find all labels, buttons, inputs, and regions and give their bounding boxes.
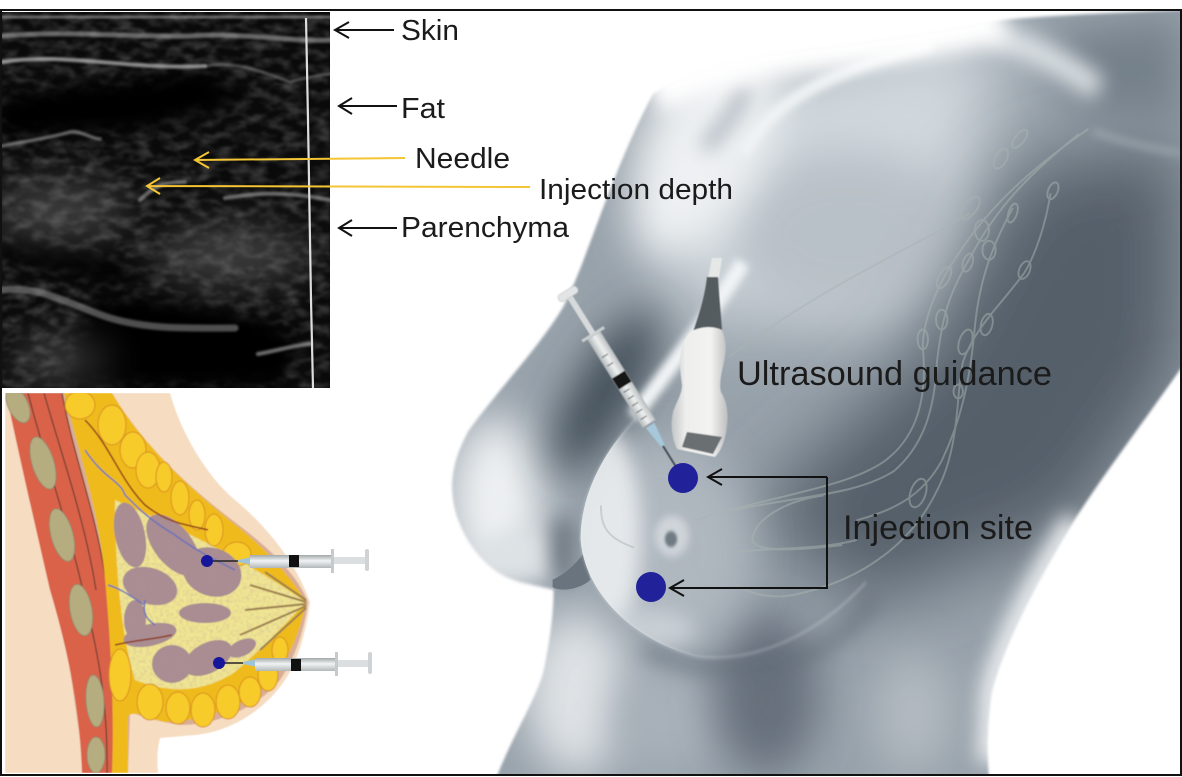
- breast lower contour: [581, 416, 866, 658]
- lobule texture: [116, 506, 300, 689]
- label: injection depth: Injection depth: [539, 174, 733, 206]
- speckle texture: [2, 12, 330, 388]
- icon: ultrasound probe: [672, 258, 728, 457]
- depth scale line: [306, 18, 313, 388]
- icon: lower syringe with marker: [213, 652, 372, 676]
- lymphatic vessels and nodes: [601, 127, 1088, 596]
- nipple: [655, 515, 689, 557]
- label: needle: Needle: [415, 143, 510, 175]
- near breast: [556, 421, 752, 659]
- blood vessels: [85, 420, 235, 645]
- dark anechoic bands: [2, 70, 300, 385]
- muscle fascia lines: [28, 393, 107, 773]
- label: skin: Skin: [401, 15, 459, 47]
- icon: upper syringe with marker: [201, 549, 369, 573]
- label: fat: Fat: [401, 93, 445, 125]
- chest highlight beside syringe: [634, 263, 743, 416]
- parenchyma glow: [0, 180, 310, 382]
- panel: ultrasound image: [0, 12, 330, 388]
- tissue echoes: [2, 17, 330, 354]
- arrow: injection depth: [147, 178, 530, 194]
- torso silhouette with soft shading: [440, 0, 1182, 777]
- chest wall muscle: [10, 393, 114, 773]
- injection site marker: upper: [668, 463, 698, 493]
- arrow: injection site bracket: [670, 469, 827, 596]
- skin and chest base: [5, 393, 310, 773]
- icon: injection syringe on torso: [555, 284, 694, 485]
- far breast fold tab: [553, 554, 591, 590]
- arrow: needle: [195, 152, 405, 168]
- panel: anatomical cross-section: [1, 384, 310, 773]
- ribs: [1, 384, 106, 773]
- pale glandular stroma: [115, 500, 306, 689]
- fat lobules: [65, 391, 288, 727]
- glandular yellow fat region: [64, 393, 306, 773]
- arrow: fat: [339, 98, 397, 114]
- panel: torso illustration with ultrasound-guided injection: [440, 0, 1182, 777]
- breast outer tissue: [62, 393, 308, 766]
- arrow: skin: [335, 22, 394, 38]
- milk ducts: [240, 572, 306, 650]
- arrow: parenchyma: [339, 220, 397, 236]
- label: parenchyma: Parenchyma: [401, 212, 570, 244]
- label: ultrasound guidance: Ultrasound guidance: [737, 355, 1052, 393]
- label: injection site: Injection site: [843, 509, 1033, 547]
- milk lobes: [108, 500, 259, 683]
- injection site marker: lower: [636, 572, 666, 602]
